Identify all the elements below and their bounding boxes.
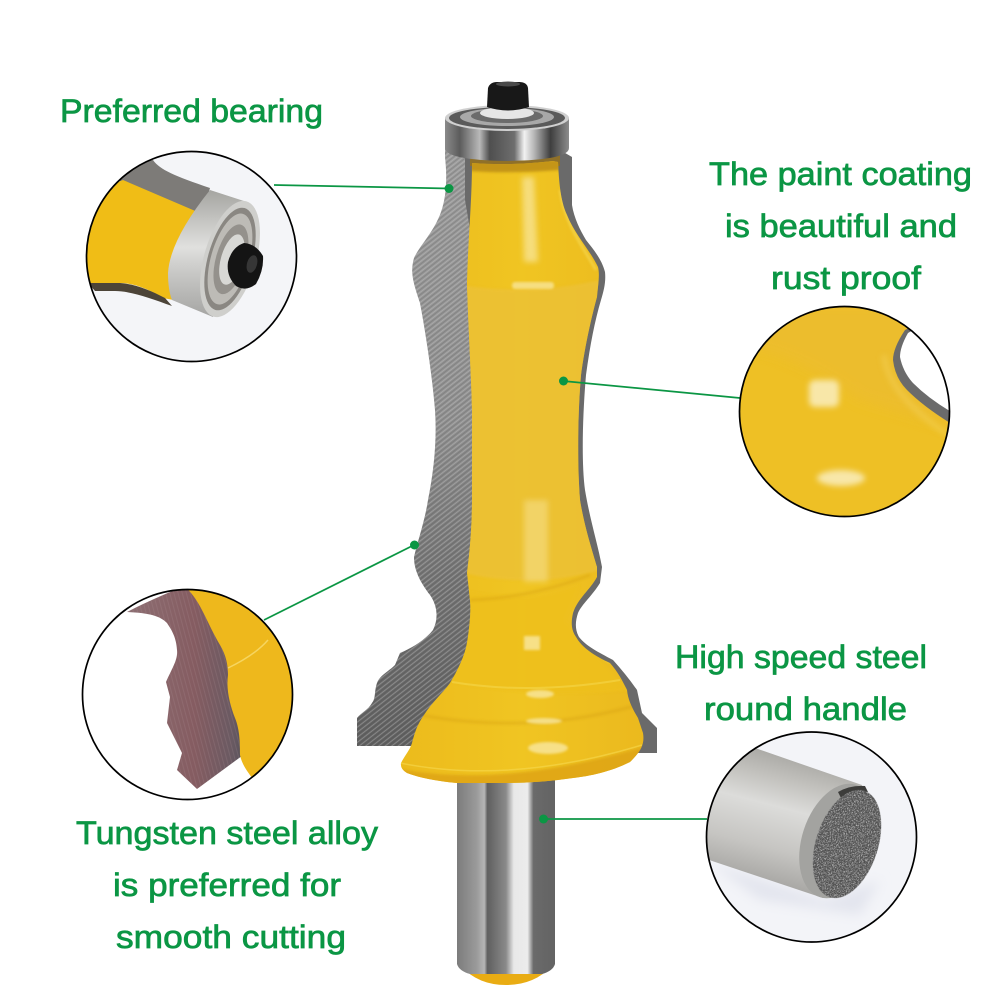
shank: round handle (457, 775, 555, 985)
label: paint coating: is beautiful and (725, 208, 957, 244)
router bit product illustration (357, 82, 657, 985)
detail circle: carbide close-up (82, 580, 300, 800)
end face (812, 790, 882, 898)
detail circle: paint coating close-up (738, 306, 950, 518)
label: tungsten steel alloy: Tungsten steel alloy (76, 815, 378, 851)
bearing and bolt (445, 82, 569, 161)
carbide blade: tungsten steel (357, 145, 657, 753)
bearing face rings (200, 201, 260, 318)
detail circle: shank end close-up (700, 732, 916, 942)
label: paint coating (709, 156, 972, 296)
label: paint coating: rust proof (771, 260, 921, 296)
bolt (228, 243, 263, 289)
label: preferred bearing: Preferred bearing (60, 93, 323, 129)
label: tungsten steel alloy (76, 815, 378, 955)
label: high speed steel handle (675, 639, 927, 727)
shadow under rod (732, 872, 872, 914)
bearing side (168, 190, 247, 317)
leader line: tungsten steel (264, 540, 419, 620)
detail circle: bearing close-up (80, 152, 296, 362)
label: high speed steel handle: round handle (704, 691, 907, 727)
lower edge (88, 283, 172, 306)
leader line: bearing (274, 184, 454, 193)
rod (700, 748, 862, 898)
leader line: round handle (539, 814, 707, 824)
yellow coating (188, 590, 292, 777)
steel edge (120, 160, 210, 211)
chamfer (799, 784, 858, 898)
shading and highlights clipped to body (395, 160, 650, 790)
label: paint coating: The paint coating (709, 156, 972, 192)
label: high speed steel handle: High speed steel (675, 639, 927, 675)
yellow painted body (395, 160, 650, 790)
label: tungsten steel alloy: is preferred for (113, 867, 341, 903)
carbide cross-section (127, 585, 250, 789)
label: tungsten steel alloy: smooth cutting (116, 919, 346, 955)
yellow body (87, 180, 195, 300)
leader line: paint coating (559, 376, 740, 398)
